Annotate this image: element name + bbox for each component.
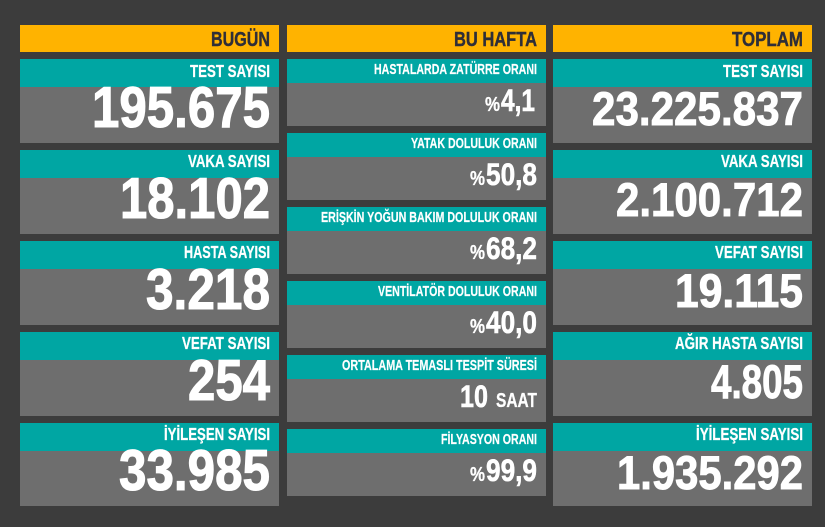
panel: hasta sayısı today: 3.218 (146, 258, 270, 322)
panel: test sayısı today: 195.675 (92, 76, 270, 140)
panel: erişkin yoğun bakım doluluk oranı: ERİŞKİN YOĞUN BAKIM DOLULUK ORANI (321, 208, 537, 226)
panel: yatak doluluk oranı: % (470, 167, 485, 190)
column: BUGÜN (20, 25, 279, 506)
panel: test sayısı total (553, 59, 812, 143)
panel: zatürre oranı: HASTALARDA ZATÜRRE ORANI (374, 61, 537, 78)
panel: hasta sayısı today: HASTA SAYISI (184, 242, 270, 262)
panel: test sayısı today (20, 59, 279, 143)
panel: vefat sayısı today: 254 (188, 349, 270, 413)
panel: erişkin yoğun bakım doluluk oranı: % (470, 241, 485, 264)
panel: ortalama temaslı tespit süresi: 10 (460, 378, 488, 414)
panel: vaka sayısı today (20, 150, 279, 234)
column: TOPLAM (553, 25, 812, 506)
panel: iyileşen sayısı total: 1.935.292 (617, 446, 803, 499)
panel: ventilatör doluluk oranı (287, 281, 546, 348)
panel: yatak doluluk oranı: YATAK DOLULUK ORANI (411, 136, 537, 152)
heading: BUGÜN (20, 25, 279, 52)
panel: zatürre oranı: 4,1 (501, 82, 535, 118)
panel: vaka sayısı total (553, 150, 812, 234)
heading: TOPLAM: TOPLAM (732, 28, 803, 51)
panel: erişkin yoğun bakım doluluk oranı: 68,2 (486, 230, 537, 266)
panel: yatak doluluk oranı: 50,8 (486, 156, 537, 192)
panel: ventilatör doluluk oranı: % (470, 315, 485, 338)
panel: ortalama temaslı tespit süresi: SAAT (496, 389, 537, 412)
panel: iyileşen sayısı total (553, 423, 812, 506)
panel: zatürre oranı: % (485, 93, 500, 116)
panel: vaka sayısı today: VAKA SAYISI (188, 151, 270, 171)
panel: ventilatör doluluk oranı: VENTİLATÖR DOLULUK ORANI (378, 283, 537, 300)
panel: filyasyon oranı: FİLYASYON ORANI (441, 431, 537, 448)
heading: BUGÜN: BUGÜN (211, 28, 270, 51)
panel: iyileşen sayısı today (20, 423, 279, 506)
panel: test sayısı today: TEST SAYISI (190, 61, 270, 81)
panel: vaka sayısı total: 2.100.712 (616, 173, 803, 226)
panel: ortalama temaslı tespit süresi: ORTALAMA TEMASLI TESPİT SÜRESİ (342, 357, 537, 374)
panel: vefat sayısı total: 19.115 (675, 264, 803, 317)
panel: yatak doluluk oranı (287, 133, 546, 200)
panel: ventilatör doluluk oranı: 40,0 (486, 304, 537, 340)
panel: zatürre oranı (287, 59, 546, 126)
panel: vaka sayısı today: 18.102 (120, 167, 270, 231)
panel: filyasyon oranı: % (470, 463, 485, 486)
panel: hasta sayısı today (20, 241, 279, 325)
panel: vefat sayısı today: VEFAT SAYISI (182, 333, 270, 353)
panel: iyileşen sayısı today: 33.985 (119, 439, 270, 503)
column: BU HAFTA (287, 25, 546, 496)
panel: erişkin yoğun bakım doluluk oranı (287, 207, 546, 274)
heading: BU HAFTA: BU HAFTA (454, 28, 537, 51)
panel: iyileşen sayısı today: İYİLEŞEN SAYISI (164, 424, 270, 444)
heading: TOPLAM (553, 25, 812, 52)
panel: ortalama temaslı tespit süresi (287, 355, 546, 422)
panel: filyasyon oranı (287, 429, 546, 496)
panel: vefat sayısı today (20, 332, 279, 416)
panel: ağır hasta sayısı total (553, 332, 812, 416)
panel: vefat sayısı total (553, 241, 812, 325)
panel: filyasyon oranı: 99,9 (486, 452, 537, 488)
heading: BU HAFTA (287, 25, 546, 52)
panel: test sayısı total: 23.225.837 (592, 82, 803, 135)
